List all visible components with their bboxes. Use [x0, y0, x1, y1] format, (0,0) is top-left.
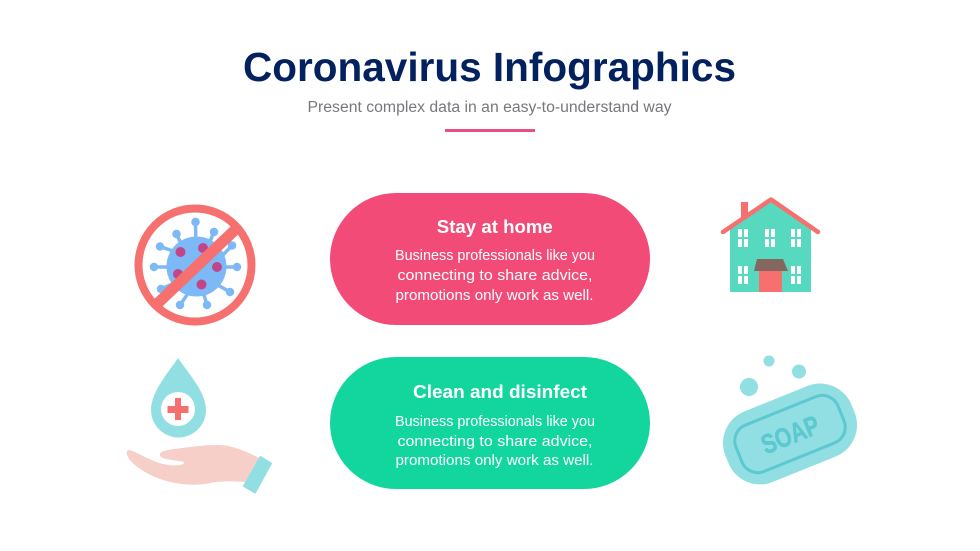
- medical cross: [168, 398, 188, 420]
- body text: clean and disinfect: Business professionals like you: [395, 414, 595, 430]
- body text: stay at home: connecting to share advice,: [398, 268, 592, 284]
- heading: clean and disinfect: Clean and disinfect: [413, 381, 587, 402]
- soap label: SOAP: [757, 410, 824, 460]
- pill background green: [330, 357, 650, 489]
- roof: [723, 200, 818, 232]
- door: [759, 270, 782, 292]
- drop: [151, 358, 206, 437]
- icon: hand with drop: [127, 358, 271, 492]
- body text: stay at home: [395, 248, 595, 304]
- title underline: [445, 129, 535, 132]
- bubbles: [740, 356, 806, 396]
- awning: [754, 259, 788, 271]
- body text: stay at home: promotions only work as well.: [396, 288, 594, 304]
- virus body: [166, 236, 226, 296]
- hand: [127, 445, 259, 485]
- panel: stay at home: [330, 193, 650, 325]
- cuff: [244, 457, 271, 492]
- icon: house: [723, 200, 818, 292]
- title: Coronavirus Infographics: [243, 44, 736, 90]
- soap bar: [713, 373, 867, 495]
- body text: clean and disinfect: promotions only work as well.: [396, 453, 594, 469]
- virus dots: [173, 243, 222, 290]
- windows: [738, 229, 801, 284]
- body text: clean and disinfect: connecting to share advice,: [398, 434, 592, 450]
- chimney: [741, 202, 748, 219]
- pill background pink: [330, 193, 650, 325]
- house wall: [730, 200, 811, 292]
- panel: clean and disinfect: [330, 357, 650, 489]
- body text: stay at home: Business professionals like you: [395, 248, 595, 264]
- subtitle: Present complex data in an easy-to-understand way: [308, 99, 672, 116]
- virus spikes: [152, 220, 240, 308]
- drop inner circle: [161, 392, 195, 426]
- body text: clean and disinfect: [395, 414, 595, 469]
- heading: stay at home: Stay at home: [437, 216, 553, 237]
- prohibition ring: [138, 208, 252, 322]
- soap inset outline: [730, 390, 850, 478]
- icon: soap: [713, 356, 867, 495]
- icon: no virus: [138, 208, 252, 322]
- prohibition slash: [157, 227, 238, 304]
